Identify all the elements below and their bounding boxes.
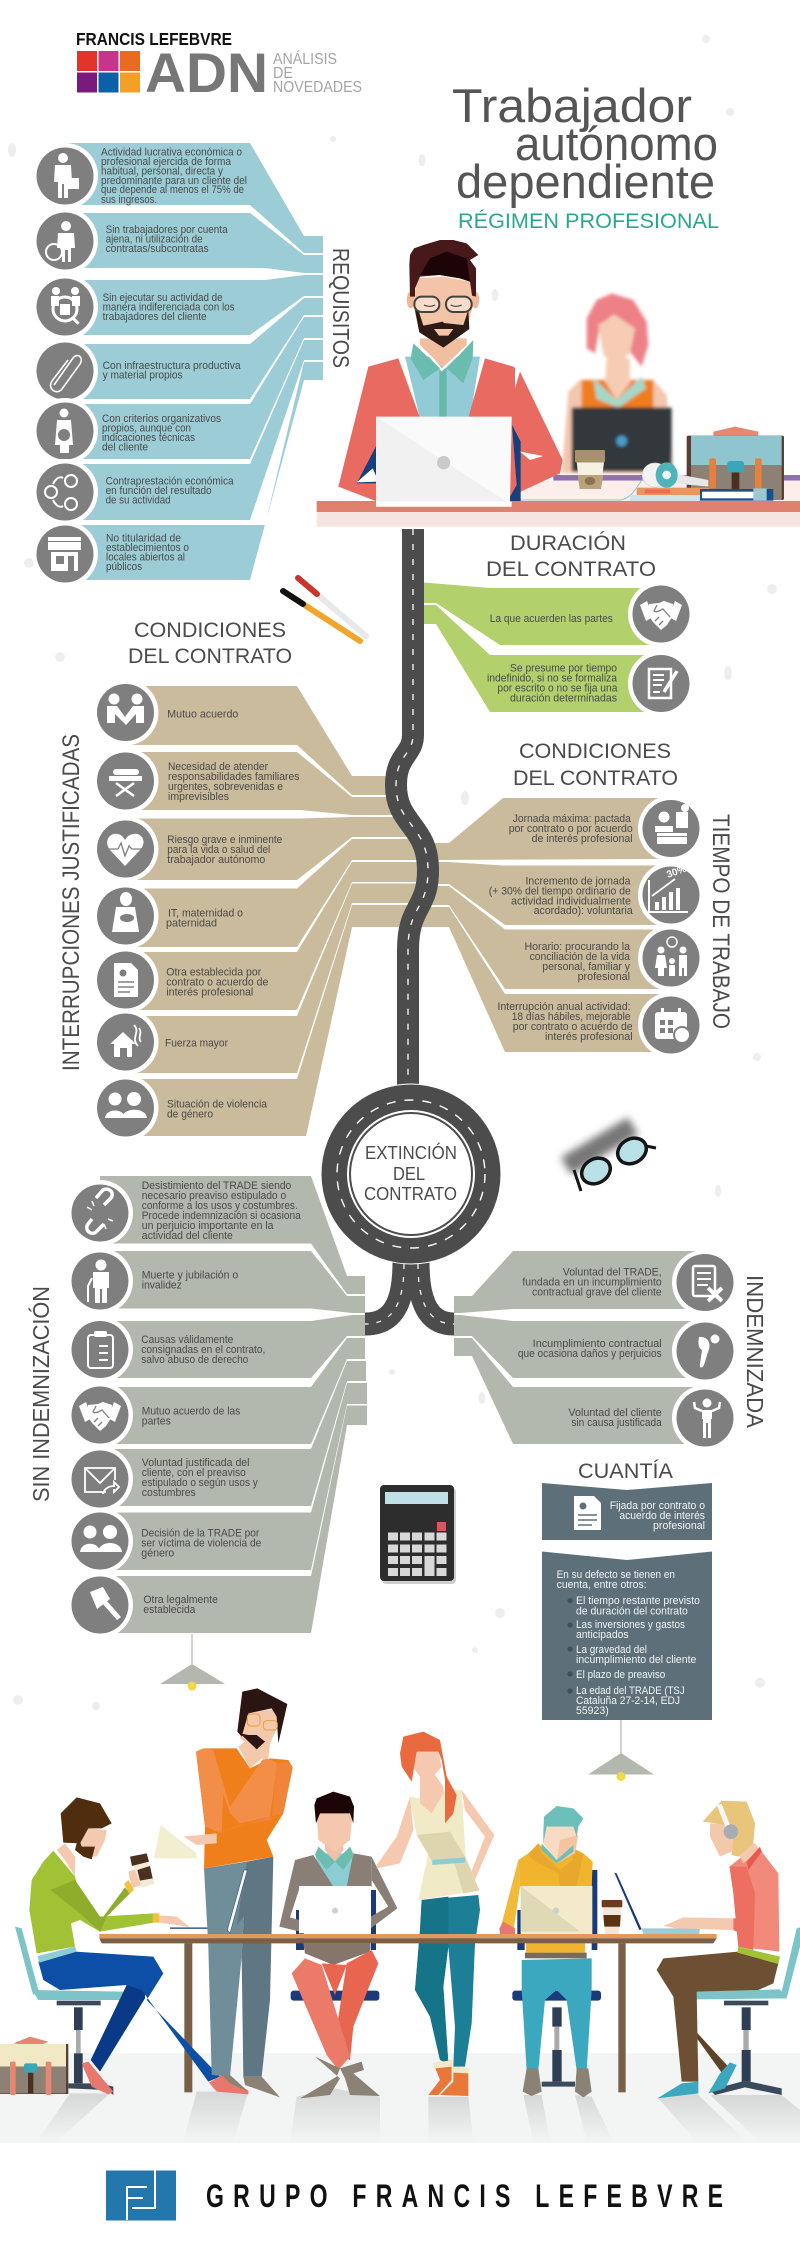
sin indemnización 5: Voluntad justificada del: [142, 1457, 250, 1469]
interrupción 2: Necesidad de atender: [168, 761, 268, 773]
icon: family: [655, 937, 687, 976]
heading: duración del contrato: [486, 532, 656, 581]
requisito 4: [32, 338, 241, 404]
pens: [283, 578, 366, 641]
road: [396, 529, 428, 1092]
icon: rising bar chart 30%: [649, 864, 688, 912]
requisito 1: sus ingresos.: [101, 194, 157, 206]
icon: man with briefcase: [54, 153, 79, 198]
heading: condiciones del contrato (right): CONDICIONES: [519, 740, 671, 763]
requisito 7: [32, 521, 189, 587]
requisito 3: Sin ejecutar su actividad de: [103, 292, 223, 304]
interrupciones heading: INTERRUPCIONES JUSTIFICADAS: [58, 734, 85, 1071]
calculator keys: [388, 1532, 446, 1576]
icon: gavel: [90, 1587, 121, 1620]
roundabout: extinción del contrato: CONTRATO: [364, 1184, 457, 1204]
sin indemnización 5: estipulado o según usos y: [142, 1477, 258, 1489]
requisito 1: Actividad lucrativa económica o: [101, 146, 242, 158]
cuantía box 2: 55923): [576, 1705, 609, 1717]
floor: [0, 2053, 800, 2143]
icon: contract document: [114, 963, 138, 997]
person 1: seated with coffee: [15, 1797, 248, 2095]
icon: shop: [48, 537, 81, 571]
icon: two people shaking hands: [107, 694, 144, 725]
logo: Francis Lefebvre ADN: ANÁLISIS: [273, 49, 337, 68]
cuantía box 2: incumplimiento del cliente: [576, 1654, 696, 1666]
tiempo 3: conciliación de la vida: [530, 951, 630, 963]
interrupción 4: [92, 883, 243, 949]
table top: [99, 1934, 717, 1943]
tiempo 4: 18 días hábiles, mejorable: [512, 1011, 631, 1023]
section: interrupciones justificadas: [58, 680, 425, 1141]
table legs: [184, 1943, 626, 2092]
sin indemnización 2: invalidez: [142, 1280, 182, 1292]
tiempo 4: interés profesional: [545, 1031, 633, 1043]
sin indemnización 3: [67, 1316, 265, 1382]
requisito 7: locales abiertos al: [106, 552, 185, 564]
interrupción 2: [92, 748, 300, 814]
indemnizada 3: [568, 1385, 738, 1451]
desk: [317, 501, 800, 527]
cuantía heading: CUANTÍA: [578, 1460, 673, 1483]
interrupción 5: [92, 947, 268, 1013]
requisito 7: establecimientos o: [106, 542, 189, 554]
requisito 2: Sin trabajadores por cuenta: [106, 224, 228, 236]
icon: elderly person with cane: [88, 1260, 109, 1303]
icon: paper clip: [51, 356, 81, 392]
cuantía box 1: [542, 1483, 712, 1540]
sin indemnización 7: establecida: [143, 1604, 195, 1616]
duración row 1: [418, 581, 694, 647]
icon: couple: [105, 1092, 147, 1118]
indemnizada 2: [518, 1318, 738, 1384]
title: Trabajador: [452, 79, 692, 132]
indemnizada 2: que ocasiona daños y perjuicios: [518, 1348, 662, 1360]
cuantía box 2: En su defecto se tienen en: [557, 1569, 675, 1581]
requisito 1: [32, 143, 247, 209]
duración row 2: [418, 605, 694, 716]
sin indemnización 1: [67, 1180, 301, 1246]
interrupción 2: responsabilidades familiares: [168, 771, 300, 783]
logo: Francis Lefebvre ADN: DE: [273, 65, 293, 82]
tiempo 4: por contrato o acuerdo de: [513, 1021, 633, 1033]
logo: Francis Lefebvre ADN: FRANCIS LEFEBVRE: [76, 29, 232, 49]
cuantía box 2: anticipados: [576, 1629, 629, 1641]
requisito 1: predominante para un cliente del: [101, 175, 247, 187]
glasses: [566, 1126, 656, 1191]
sin indemnización 1: conforme a los usos y costumbres.: [142, 1200, 298, 1212]
duración row 1: La que acuerden las partes: [490, 613, 613, 625]
heading: condiciones del contrato (left): CONDICIONES: [134, 619, 286, 642]
requisito 6: [32, 459, 234, 525]
icon: handshake: [640, 601, 682, 630]
indemnizada 1: [522, 1250, 738, 1316]
sin indemnización 1: necesario preaviso estipulado o: [142, 1190, 286, 1202]
section: tiempo de trabajo: [418, 796, 734, 1058]
interrupción 5: interés profesional: [166, 986, 253, 998]
sin indemnización 6: [67, 1508, 261, 1574]
indemnizada heading: INDEMNIZADA: [742, 1275, 768, 1429]
cuantía box 1: Fijada por contrato o: [610, 1500, 705, 1512]
icon: rising bar chart 30%: 30%: [665, 864, 688, 881]
requisito 1: habitual, personal, directa y: [101, 166, 224, 178]
duración row 2: duración determinadas: [510, 692, 617, 704]
heading: duración del contrato: DEL CONTRATO: [486, 558, 656, 581]
team illustration: left half: [0, 1688, 397, 2098]
cuantía box 2: Las inversiones y gastos: [576, 1619, 685, 1631]
calculator: [380, 1485, 456, 1584]
icon: money exchange: [45, 475, 77, 510]
title: RÉGIMEN PROFESIONAL: [458, 210, 719, 233]
interrupción 3: Riesgo grave e inminente: [167, 834, 282, 846]
sin indemnización 1: actividad del cliente: [142, 1230, 233, 1242]
icon: document with cross: [693, 1266, 722, 1301]
cuantía box 2: La gravedad del: [576, 1644, 647, 1656]
title: [452, 79, 719, 233]
tiempo 2: acordado): voluntaria: [534, 905, 633, 917]
interrupción 5: contrato o acuerdo de: [166, 976, 268, 988]
heading: condiciones del contrato (left): DEL CONTRATO: [128, 645, 292, 668]
requisito 3: trabajadores del cliente: [103, 311, 207, 323]
cuantía box 2: El tiempo restante previsto: [576, 1595, 700, 1607]
sin indemnización 5: costumbres: [142, 1487, 196, 1499]
logo: Francis Lefebvre ADN: ADN: [145, 41, 268, 104]
person 2: standing in orange: [154, 1688, 293, 2097]
sin indemnización 7: [67, 1572, 218, 1638]
requisito 5: [32, 398, 221, 464]
tiempo 1: por contrato o por acuerdo: [509, 823, 633, 835]
interrupción 3: para la vida o salud del: [167, 844, 270, 856]
interrupción 7: de género: [167, 1108, 213, 1120]
title: dependiente: [456, 155, 715, 208]
requisito 3: manera indiferenciada con los: [103, 302, 235, 314]
tiempo 2: [489, 862, 704, 928]
icon: heart with pulse: [107, 834, 144, 866]
heading: condiciones del contrato (right): DEL CONTRATO: [513, 767, 678, 790]
sin indemnización 7: Otra legalmente: [143, 1594, 218, 1606]
tiempo 1: Jornada máxima: pactada: [513, 813, 631, 825]
tiempo 3: [524, 925, 704, 991]
sin indemnización 1: un perjuicio importante en la: [142, 1220, 274, 1232]
cuantía box 2: El plazo de preaviso: [576, 1669, 665, 1681]
requisito 7: públicos: [106, 561, 142, 573]
person 4: standing woman: [377, 1732, 494, 2096]
sin indemnización 3: salvo abuso de derecho: [141, 1354, 248, 1366]
duración row 2: Se presume por tiempo: [510, 662, 617, 674]
icon: couple: [80, 1525, 122, 1552]
list bullets: [567, 1598, 573, 1694]
interrupción 4: paternidad: [166, 918, 217, 930]
tiempo 2: (+ 30% del tiempo ordinario de: [489, 886, 631, 898]
interrupción 2: urgentes, sobrevenidas e: [168, 781, 283, 793]
cuantía box 2: cuenta, entre otros:: [557, 1579, 647, 1591]
requisito 5: Con criterios organizativos: [102, 413, 221, 425]
interrupción 7: [92, 1075, 267, 1141]
tiempo 3: personal, familiar y: [542, 961, 631, 973]
illustration: man and woman at desk: [317, 240, 800, 527]
person 6: seated with headphones: [657, 1801, 800, 2098]
section: duración: [418, 581, 694, 716]
sin indemnización 2: Muerte y jubilación o: [142, 1270, 238, 1282]
interrupción 2: imprevisibles: [168, 791, 229, 803]
interrupción 3: trabajador autónomo: [167, 854, 265, 866]
duración row 2: indefinido, si no se formaliza: [487, 672, 617, 684]
lamp right: [588, 1720, 654, 1781]
requisitos panels: [66, 143, 323, 580]
icon: person with watch: [55, 408, 73, 453]
indemnizada 1: contractual grave del cliente: [532, 1286, 662, 1298]
icon: pregnant woman: [112, 892, 139, 932]
coffee cup on table: [602, 1900, 622, 1934]
requisito 5: propios, aunque con: [102, 422, 191, 434]
icon: handshake: [79, 1402, 121, 1431]
icon: envelope with arrow: [85, 1468, 119, 1494]
requisitos heading: REQUISITOS: [328, 248, 354, 368]
title: autónomo: [515, 117, 718, 170]
footer logo mark: [106, 2170, 176, 2220]
interrupciones panels: [125, 686, 425, 1136]
lamp left: [160, 1634, 225, 1690]
icon: calendar with clock: [655, 1008, 690, 1043]
sin indemnización 4: Mutuo acuerdo de las: [142, 1406, 240, 1418]
interrupción 5: Otra establecida por: [166, 966, 262, 978]
footer brand name: GRUPO FRANCIS LEFEBVRE: [206, 2178, 723, 2214]
interrupción 3: [92, 816, 282, 882]
indemnizada panels: [454, 1251, 700, 1444]
tiempo 4: Interrupción anual actividad:: [497, 1001, 631, 1013]
requisito 6: de su actividad: [106, 494, 171, 506]
blurred woman in background: [562, 293, 673, 473]
team illustration: right half: [377, 1732, 800, 2098]
bag on floor: [0, 2037, 68, 2095]
cuantía box 2: [542, 1552, 712, 1720]
icon: stretcher: [109, 769, 142, 796]
requisito 6: en función del resultado: [106, 485, 212, 497]
requisito 2: contratas/subcontratas: [106, 243, 209, 255]
interrupción 4: IT, maternidad o: [168, 908, 243, 920]
tiempo panels: [418, 798, 665, 1052]
icon: broken chain: [87, 1189, 113, 1233]
sin indemnización 1: Procede indemnización si ocasiona: [142, 1210, 301, 1222]
sin indemnización 5: cliente, con el preaviso: [142, 1467, 246, 1479]
road fork: [365, 1262, 454, 1324]
sin indemnización 3: consignadas en el contrato,: [141, 1344, 265, 1356]
section: requisitos: [32, 143, 354, 587]
icon: clipboard: [88, 1331, 113, 1368]
icon: magnifier over workers: [51, 287, 80, 325]
tiempo 1: [509, 796, 704, 862]
heading: condiciones del contrato (right): [513, 740, 678, 790]
tiempo heading: TIEMPO DE TRABAJO: [707, 814, 734, 1029]
logo: Francis Lefebvre ADN: [76, 29, 362, 104]
interrupción 6: [92, 1009, 228, 1075]
interrupción 1: [92, 680, 238, 746]
cuantía box 2: Cataluña 27-2-14, EDJ: [576, 1695, 680, 1707]
person 5: seated in yellow hoodie: [499, 1806, 601, 2097]
indemnizada 2: Incumplimiento contractual: [533, 1338, 662, 1350]
sin indemnización 1: Desistimiento del TRADE siendo: [142, 1180, 291, 1192]
duración row 2: por escrito o no se fija una: [497, 682, 617, 694]
roundabout: extinción del contrato: [321, 1084, 501, 1264]
heading: condiciones del contrato (left): [128, 619, 292, 668]
laptop right: [614, 1873, 700, 1934]
bag: [687, 427, 784, 500]
sin indemnización 3: Causas válidamente: [141, 1334, 233, 1346]
sin indemnización 4: [67, 1382, 240, 1448]
requisito 1: que depende al menos el 75% de: [101, 184, 244, 196]
requisito 3: [32, 274, 235, 340]
indemnizada 1: Voluntad del TRADE,: [563, 1266, 662, 1278]
heading: duración del contrato: DURACIÓN: [510, 532, 626, 555]
sin indemnización 5: [67, 1446, 258, 1512]
person 3: seated in centre: [279, 1792, 397, 2098]
indemnizada 3: sin causa justificada: [571, 1417, 662, 1429]
icon: person shrugging: [694, 1398, 720, 1438]
icon: house on fire: [110, 1025, 141, 1057]
interrupción 6: Fuerza mayor: [165, 1038, 228, 1050]
tiempo 3: Horario: procurando la: [524, 941, 630, 953]
sin indemnización 2: [67, 1248, 238, 1314]
interrupción 7: Situación de violencia: [167, 1098, 267, 1110]
indemnizada 1: fundada en un incumplimiento: [522, 1276, 662, 1288]
cuantía box 1: profesional: [653, 1520, 705, 1532]
icon: person at desk: [655, 804, 689, 844]
interrupción 1: Mutuo acuerdo: [167, 708, 238, 720]
sin indemnización 6: Decisión de la TRADE por: [141, 1528, 260, 1540]
requisito 2: [32, 208, 228, 274]
sin indemnización 6: ser víctima de violencia de: [141, 1538, 261, 1550]
cuantía box 2: de duración del contrato: [576, 1606, 688, 1618]
section: sin indemnización: [28, 1176, 367, 1638]
laptop: [376, 417, 512, 507]
requisito 4: Con infraestructura productiva: [103, 360, 241, 372]
tiempo 2: actividad individualmente: [511, 896, 631, 908]
tiempo 1: de interés profesional: [532, 833, 633, 845]
cuantía box 1: acuerdo de interés: [619, 1510, 705, 1522]
sin indemnización 4: partes: [142, 1416, 171, 1428]
man: [338, 240, 563, 502]
requisito 5: indicaciones técnicas: [102, 432, 195, 444]
logo: Francis Lefebvre ADN: NOVEDADES: [273, 79, 362, 96]
headphones: [520, 462, 708, 500]
icon: person bent over: [698, 1334, 720, 1368]
tiempo 3: profesional: [578, 971, 630, 983]
requisito 7: No titularidad de: [106, 532, 181, 544]
roundabout: extinción del contrato: EXTINCIÓN: [365, 1142, 457, 1163]
requisito 4: y material propios: [103, 370, 183, 382]
sin indemnización 6: género: [141, 1548, 174, 1560]
requisito 1: profesional ejercida de forma: [101, 156, 231, 168]
icon: document with pen: [649, 669, 677, 698]
tiempo 2: Incremento de jornada: [526, 876, 631, 888]
sin indemnización heading: SIN INDEMNIZACIÓN: [28, 1286, 54, 1502]
requisito 6: Contraprestación económica: [106, 476, 234, 488]
requisito 5: del cliente: [102, 442, 148, 454]
sin indemnización panels: [100, 1176, 367, 1633]
logo colour squares: [77, 51, 140, 92]
indemnizada 3: Voluntad del cliente: [568, 1407, 662, 1419]
icon: man with clock: [46, 221, 75, 262]
roundabout: extinción del contrato: DEL: [393, 1164, 425, 1184]
requisito 2: ajena, ni utilización de: [106, 234, 203, 246]
section: cuantía: [542, 1460, 712, 1720]
cuantía box 2: La edad del TRADE (TSJ: [576, 1685, 685, 1697]
section: indemnizada: [454, 1250, 768, 1451]
icon: document: [574, 1496, 601, 1530]
coffee cup: [575, 450, 605, 489]
books: [630, 488, 773, 501]
tiempo 4: [497, 992, 704, 1058]
